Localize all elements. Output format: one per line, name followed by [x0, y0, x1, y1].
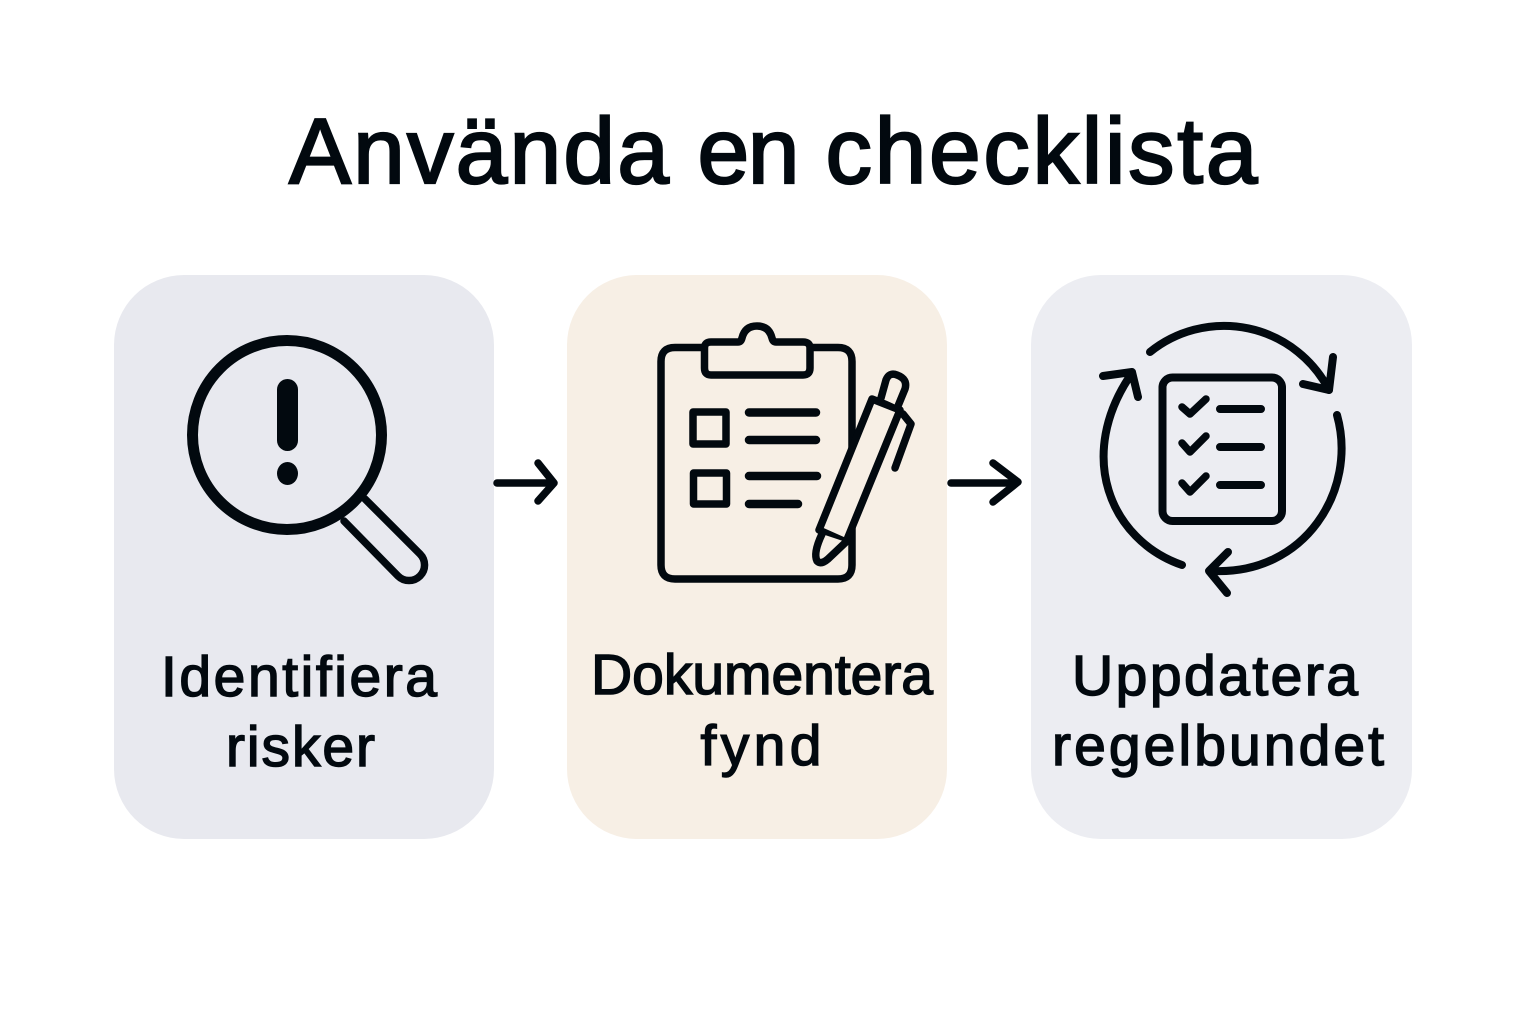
label: identifiera risker: Identifiera [161, 645, 437, 709]
icon: magnifying glass with exclamation mark [192, 340, 425, 581]
label: dokumentera fynd: fynd [700, 714, 822, 778]
panel: identifiera risker [114, 275, 494, 839]
icon: checklist with cycle arrows [1103, 326, 1342, 593]
panel: uppdatera regelbundet [1031, 275, 1412, 839]
label: uppdatera regelbundet: Uppdatera [1072, 644, 1358, 708]
label: uppdatera regelbundet: regelbundet [1052, 714, 1384, 778]
arrow: step 1 to step 2 [497, 463, 554, 501]
label: identifiera risker: risker [226, 715, 375, 779]
title: checklista [826, 99, 1258, 203]
arrow: step 2 to step 3 [951, 463, 1018, 502]
panel: dokumentera fynd [567, 275, 947, 839]
icon: clipboard with pen [661, 326, 911, 579]
title: Använda [289, 99, 669, 203]
label: dokumentera fynd: Dokumentera [591, 643, 933, 707]
title: en [698, 99, 800, 203]
